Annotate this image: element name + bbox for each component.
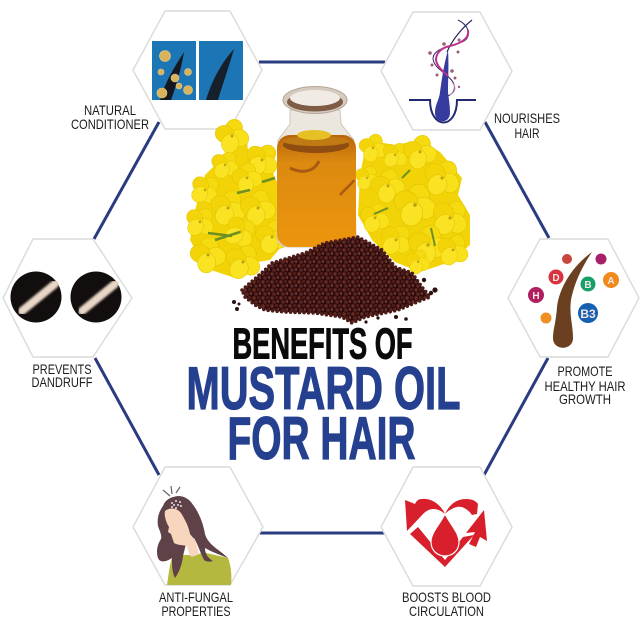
hexagon: nourishes hair — [381, 12, 512, 130]
hexagon: prevents dandruff — [3, 239, 132, 357]
icon: scalp with dandruff — [10, 272, 122, 322]
hexagon: promote healthy hair growth — [508, 239, 639, 357]
label: natural conditioner: CONDITIONER — [71, 116, 149, 132]
label: promote healthy hair growth: PROMOTE — [558, 363, 612, 379]
hexagon: boosts blood circulation — [381, 467, 512, 586]
label: nourishes hair: NOURISHES — [494, 110, 560, 126]
hexagon: natural conditioner — [133, 11, 262, 129]
label: natural conditioner: NATURAL — [84, 102, 136, 118]
icon: hair with vitamins: H — [532, 291, 540, 302]
connector lines — [94, 62, 549, 533]
title line: mustard oil: MUSTARD OIL — [186, 355, 460, 422]
label: nourishes hair: HAIR — [514, 125, 540, 141]
icon: heart with blood drop — [405, 499, 487, 567]
label: prevents dandruff: PREVENTS — [32, 361, 92, 377]
title line: benefits of: BENEFITS OF — [232, 320, 412, 368]
icon: hair follicle — [409, 20, 476, 122]
mustard flowers right — [350, 130, 477, 278]
icon: hair with vitamins: D — [552, 273, 560, 284]
label: anti-fungal properties: ANTI-FUNGAL — [159, 589, 233, 605]
label: boosts blood circulation: CIRCULATION — [409, 603, 484, 619]
icon: hair with vitamins: B — [584, 280, 592, 291]
title — [186, 320, 460, 472]
title line: for hair: FOR HAIR — [228, 405, 416, 472]
icon: woman with scalp irritation — [157, 486, 231, 585]
hexagon: anti-fungal properties — [133, 467, 263, 585]
mustard flowers left — [178, 115, 294, 287]
label: anti-fungal properties: PROPERTIES — [162, 603, 230, 619]
label: boosts blood circulation: BOOSTS BLOOD — [402, 589, 491, 605]
mustard seeds — [232, 237, 438, 324]
icon: hair with vitamins: A — [607, 276, 615, 287]
icon: hair with vitamins — [528, 252, 619, 348]
label: prevents dandruff: DANDRUFF — [32, 374, 92, 390]
icon: hair with conditioner — [152, 41, 243, 100]
illustration: mustard flowers, oil bottle and seeds — [178, 86, 477, 324]
icon: hair with vitamins: B3 — [580, 307, 596, 321]
oil bottle — [277, 86, 356, 247]
label: promote healthy hair growth: GROWTH — [559, 391, 611, 407]
